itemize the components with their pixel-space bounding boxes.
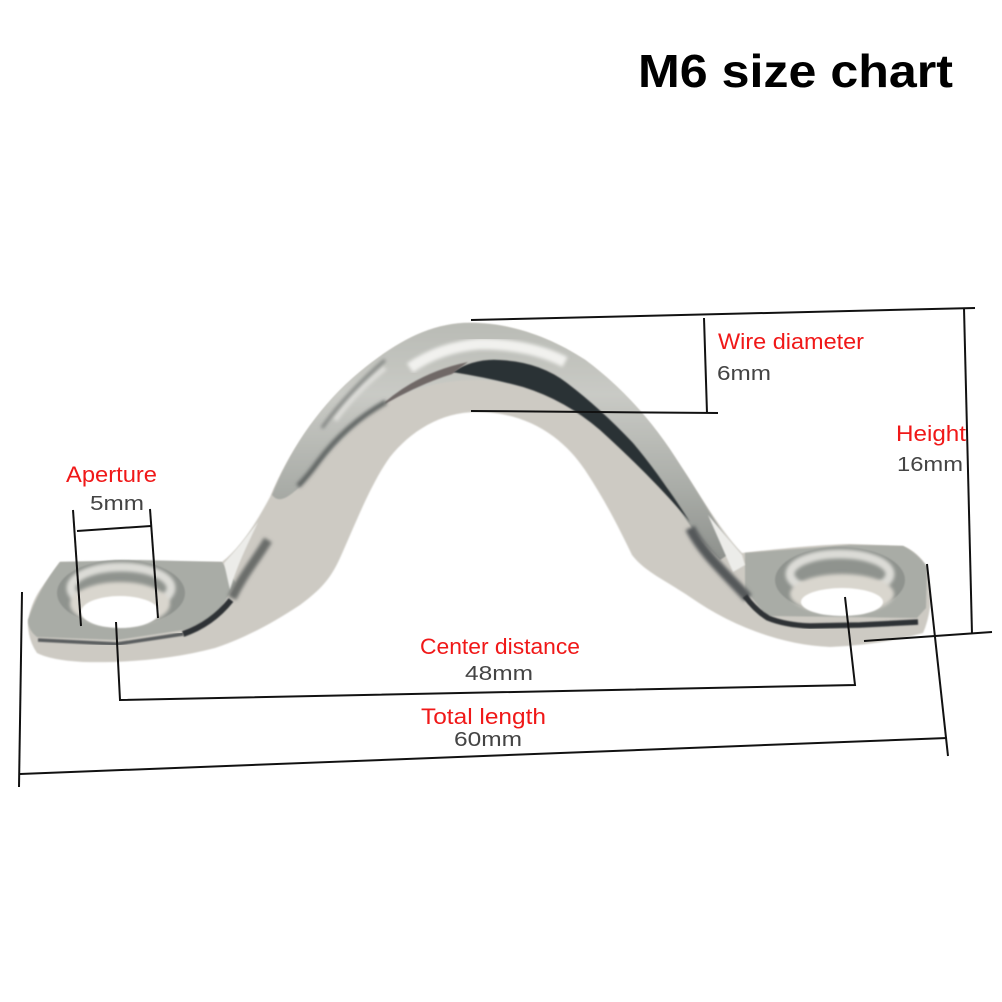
left countersink — [57, 560, 185, 628]
right tab top face — [745, 545, 927, 618]
right flank bright wedge — [708, 515, 745, 572]
right flank dark shadow — [690, 528, 748, 598]
label: total length: 60mm — [454, 729, 522, 751]
title: M6 size chart — [638, 45, 953, 97]
stainless steel pad eye — [28, 323, 931, 662]
dark edge on left flank — [298, 402, 386, 486]
label: center distance: 48mm — [465, 663, 533, 685]
arch left dark streak — [322, 360, 385, 428]
arch left streak highlights — [335, 368, 385, 420]
label: total length: Total length — [421, 704, 546, 729]
rim — [57, 560, 185, 626]
left tab dark lower edge — [38, 634, 183, 644]
left flank bright wedge — [224, 522, 258, 590]
dark reflection on arch — [452, 360, 690, 522]
dimension lines — [19, 308, 992, 787]
rim — [775, 547, 905, 613]
left flank dark shadow — [232, 540, 268, 598]
inner cone — [790, 574, 894, 614]
label: aperture: Aperture — [66, 462, 157, 487]
right countersink — [775, 547, 905, 616]
label: wire diameter: 6mm — [717, 363, 771, 385]
brownish reflection on arch — [385, 362, 468, 404]
label: center distance — [420, 634, 580, 685]
label: aperture — [66, 462, 157, 515]
sparkle ring — [71, 567, 171, 609]
label: wire diameter — [717, 329, 864, 385]
label: total length — [421, 704, 546, 751]
label: wire diameter: Wire diameter — [718, 329, 864, 354]
hole — [801, 588, 883, 616]
bright highlight on arch — [410, 344, 565, 368]
polished upper band — [272, 323, 735, 560]
left tab top face — [28, 560, 236, 640]
label: center distance: Center distance — [420, 634, 580, 659]
hole — [81, 596, 159, 628]
right tab dark lower edge — [745, 596, 918, 626]
label: height — [896, 421, 966, 476]
sparkle ring — [790, 554, 890, 594]
label: height: Height — [896, 421, 966, 446]
bracket silhouette — [28, 323, 931, 662]
inner cone — [70, 582, 170, 626]
label: height: 16mm — [897, 454, 963, 476]
label: aperture: 5mm — [90, 493, 144, 515]
